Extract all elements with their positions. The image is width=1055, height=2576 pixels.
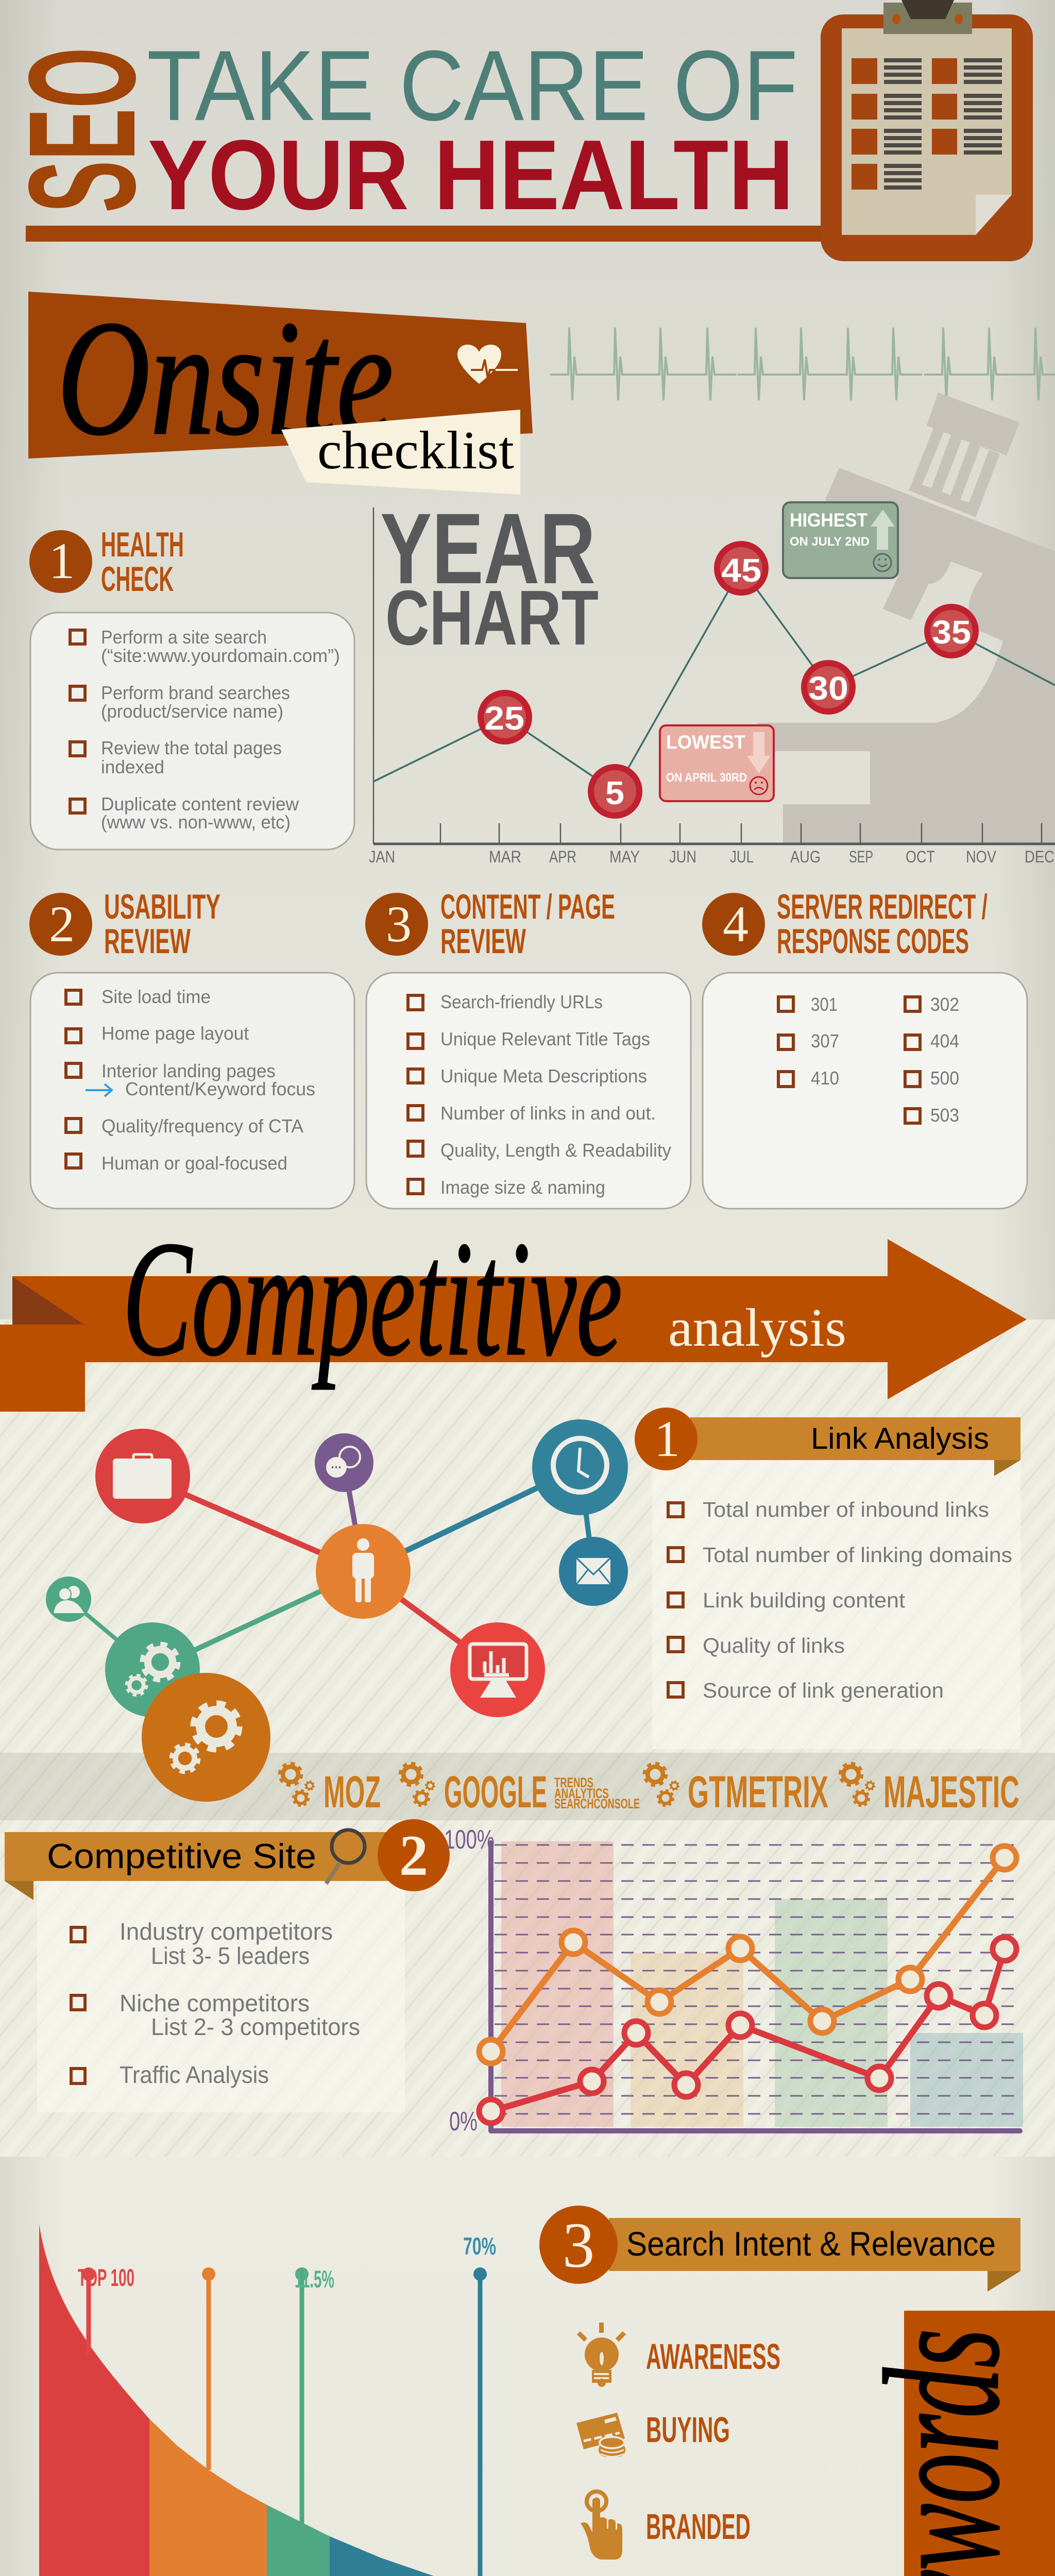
panel: usability review [29, 887, 354, 1209]
checklist card: 500 [930, 1067, 959, 1089]
heading [777, 887, 988, 961]
microscope watermark [757, 393, 1055, 844]
chart title [380, 493, 599, 661]
month labels: AUG [790, 848, 821, 866]
checklist: List 3- 5 leaders [151, 1942, 310, 1969]
data point 45: 45 [721, 552, 761, 589]
ribbon header [539, 2206, 1020, 2292]
data point 25: 25 [484, 700, 524, 737]
data point 35 [924, 604, 979, 658]
month labels: JUL [730, 848, 754, 866]
ribbon header: 3 [563, 2210, 594, 2281]
callout: highest: HIGHEST [790, 510, 867, 531]
month labels: SEP [849, 848, 873, 866]
data point 45 [714, 541, 769, 596]
white backing panel [652, 1460, 1020, 1749]
checklist card [30, 973, 354, 1209]
month labels [369, 848, 1054, 866]
checklist card: Unique Meta Descriptions [440, 1065, 647, 1087]
number badge 3 [365, 893, 428, 956]
node: orange gears [142, 1673, 270, 1802]
checklist card: indexed [101, 756, 164, 777]
ribbon header: Search Intent & Relevance [626, 2225, 996, 2263]
red series [479, 1937, 1016, 2123]
checklist card [703, 973, 1027, 1209]
tool: google: SEARCHCONSOLE [554, 1796, 640, 1811]
month labels: APR [549, 848, 576, 866]
checklist card: Site load time [101, 986, 211, 1007]
checklist card [30, 613, 354, 850]
number badge 1: 1 [49, 532, 75, 589]
data point 30: 30 [808, 670, 848, 707]
data point 30 [801, 660, 856, 715]
tool: moz: MOZ [324, 1767, 381, 1817]
panel: competitive banner arrow [0, 1208, 1027, 1412]
checklist card: Quality/frequency of CTA [101, 1115, 303, 1137]
number badge 1 [29, 530, 92, 593]
checklist card: Search-friendly URLs [440, 991, 603, 1012]
orange series [479, 1846, 1016, 2063]
icon: pointing hand [581, 2492, 622, 2560]
label: branded: BRANDED [646, 2506, 751, 2547]
icon: gears [400, 1764, 435, 1806]
title: your health: YOUR HEALTH [148, 119, 794, 230]
month labels: NOV [966, 848, 997, 866]
axes [491, 1843, 1020, 2131]
checklist card: 301 [811, 994, 838, 1015]
number badge 2: 2 [49, 895, 75, 953]
white backing panel [37, 1881, 405, 2112]
chart axes and ticks [373, 507, 1055, 844]
checklist card: 503 [930, 1105, 959, 1126]
node: person [316, 1524, 411, 1619]
label: buying: BUYING [646, 2410, 730, 2450]
node: chat [315, 1433, 373, 1492]
checklist: Total number of inbound links [703, 1498, 989, 1521]
checklist card: (www vs. non-www, etc) [101, 811, 291, 833]
node: monitor [450, 1622, 545, 1717]
checklist card: Interior landing pages [101, 1060, 276, 1081]
pin: red [82, 2267, 95, 2354]
number badge 3: 3 [386, 895, 412, 953]
callout: lowest [660, 725, 774, 801]
month labels: JAN [369, 848, 395, 866]
data point 35: 35 [932, 614, 971, 651]
heading: HEALTH [101, 525, 184, 564]
node: clock [532, 1419, 628, 1515]
checklist card: Content/Keyword focus [125, 1078, 315, 1099]
node: users [46, 1577, 91, 1622]
heading [104, 887, 220, 961]
checklist card [366, 973, 691, 1209]
label: top 100: TOP 100 [78, 2264, 134, 2291]
background bars [501, 1841, 1023, 2127]
pin: orange [202, 2267, 215, 2470]
checklist card: Human or goal-focused [101, 1153, 287, 1174]
chart line [373, 568, 1055, 791]
callout: lowest: ON APRIL 30RD [666, 771, 747, 785]
curve area [39, 2224, 434, 2576]
heading: REVIEW [104, 922, 191, 961]
checklist card: Quality, Length & Readability [440, 1140, 671, 1161]
axis label 0%: 0% [449, 2107, 478, 2137]
checklist tag: checklist [317, 420, 514, 480]
heading: onsite script: Onsite [57, 287, 394, 469]
checklist card: Number of links in and out. [440, 1103, 656, 1124]
checklist: Source of link generation [703, 1679, 944, 1702]
node: briefcase [95, 1429, 190, 1523]
callout: lowest: LOWEST [666, 732, 745, 753]
callout: highest [783, 502, 898, 578]
checklist card: (“site:www.yourdomain.com”) [101, 645, 340, 666]
checklist card: (product/service name) [101, 701, 283, 722]
label: 70%: 70% [463, 2232, 496, 2260]
ribbon header: 2 [399, 1824, 428, 1888]
panel: content page review [365, 887, 691, 1209]
checklist card: 404 [930, 1030, 959, 1052]
striped section background [0, 1319, 1055, 2157]
month labels: OCT [906, 848, 935, 866]
checklist card: Image size & naming [440, 1177, 605, 1198]
panel: server redirect response codes [702, 887, 1027, 1209]
checklist card: 302 [930, 994, 959, 1015]
heading: USABILITY [104, 887, 220, 926]
checklist tag [281, 410, 520, 495]
checklist: Total number of linking domains [703, 1543, 1012, 1567]
checklist [668, 1498, 1012, 1702]
icon: heart with pulse [457, 345, 518, 384]
axis label 100%: 100% [444, 1825, 495, 1855]
icon: clipboard [821, 0, 1033, 261]
tool: gtmetrix: GTMETRIX [688, 1767, 828, 1817]
node: green gears [105, 1622, 200, 1717]
checklist [71, 1918, 360, 2088]
icon: card and coins [576, 2413, 625, 2457]
ribbon header: 1 [654, 1410, 680, 1467]
checklist: Industry competitors [120, 1918, 333, 1945]
chart title: CHART [385, 574, 599, 661]
month labels: MAY [609, 848, 640, 866]
number badge 4: 4 [723, 895, 748, 953]
dashed grid lines [495, 1845, 1016, 2114]
checklist card: Home page layout [101, 1023, 249, 1044]
tool: google: TRENDS [554, 1775, 593, 1790]
checklist card: Perform a site search [101, 626, 267, 648]
tool: google: ANALYTICS [554, 1786, 609, 1801]
data point 5 [588, 764, 642, 819]
icon: gears [644, 1764, 679, 1806]
checklist: Niche competitors [120, 1990, 310, 2016]
node: mail [559, 1537, 628, 1606]
month labels: JUN [669, 848, 696, 866]
ekg pulse line [550, 328, 1055, 400]
tools strip [280, 1764, 1019, 1817]
year chart [369, 493, 1055, 866]
heading: analysis: analysis [668, 1297, 846, 1358]
ribbon header [635, 1408, 1020, 1476]
chart: competitor percentage [444, 1825, 1023, 2137]
checklist: Quality of links [703, 1634, 845, 1657]
pin: green [295, 2267, 309, 2524]
heading: REVIEW [440, 922, 526, 961]
ribbon header: Competitive Site [47, 1837, 316, 1876]
ribbon header: Link Analysis [811, 1422, 989, 1455]
panel: onsite banner [28, 287, 533, 495]
chart title: YEAR [380, 493, 595, 605]
callout: highest: ON JULY 2ND [790, 535, 870, 549]
number badge 4 [702, 893, 765, 956]
data point 25 [478, 690, 532, 744]
icon: gears [840, 1764, 875, 1806]
checklist: Link building content [703, 1588, 906, 1612]
network diagram [46, 1419, 628, 1802]
checklist card: Unique Relevant Title Tags [440, 1028, 650, 1049]
heading [440, 887, 615, 961]
title: take care of: TAKE CARE OF [147, 30, 798, 142]
checklist: List 2- 3 competitors [151, 2013, 360, 2040]
heading: competitive script: Competitive [123, 1208, 622, 1390]
tool: google: GOOGLE [444, 1767, 547, 1817]
icon: magnifier [326, 1830, 365, 1884]
panel: keywords label [851, 2311, 1055, 2576]
checklist card: 307 [811, 1030, 839, 1052]
ribbon header [5, 1819, 450, 1900]
icon: light bulb [578, 2323, 624, 2387]
checklist card: Perform brand searches [101, 682, 290, 703]
network connectors [69, 1463, 593, 1670]
heading [101, 525, 184, 599]
panel: health check [29, 525, 354, 850]
title underline bar [26, 226, 829, 242]
checklist card: Review the total pages [101, 737, 282, 758]
data point 5: 5 [605, 774, 624, 811]
heading: CONTENT / PAGE [440, 887, 615, 926]
number badge 2 [29, 893, 92, 956]
label: 11.5%: 11.5% [295, 2265, 334, 2293]
heading: CHECK [101, 560, 174, 599]
panel: link analysis [635, 1408, 1020, 1749]
pin: teal [473, 2267, 487, 2576]
panel: competitive site [5, 1819, 450, 2112]
chart: long tail curve [39, 2224, 496, 2576]
checklist card: 410 [811, 1067, 839, 1089]
checklist: Traffic Analysis [120, 2061, 269, 2088]
icon: gears [280, 1764, 314, 1806]
month labels: MAR [489, 848, 521, 866]
label: awareness: AWARENESS [646, 2336, 780, 2377]
panel: search intent and relevance [539, 2206, 1020, 2576]
checklist card: Duplicate content review [101, 793, 299, 815]
